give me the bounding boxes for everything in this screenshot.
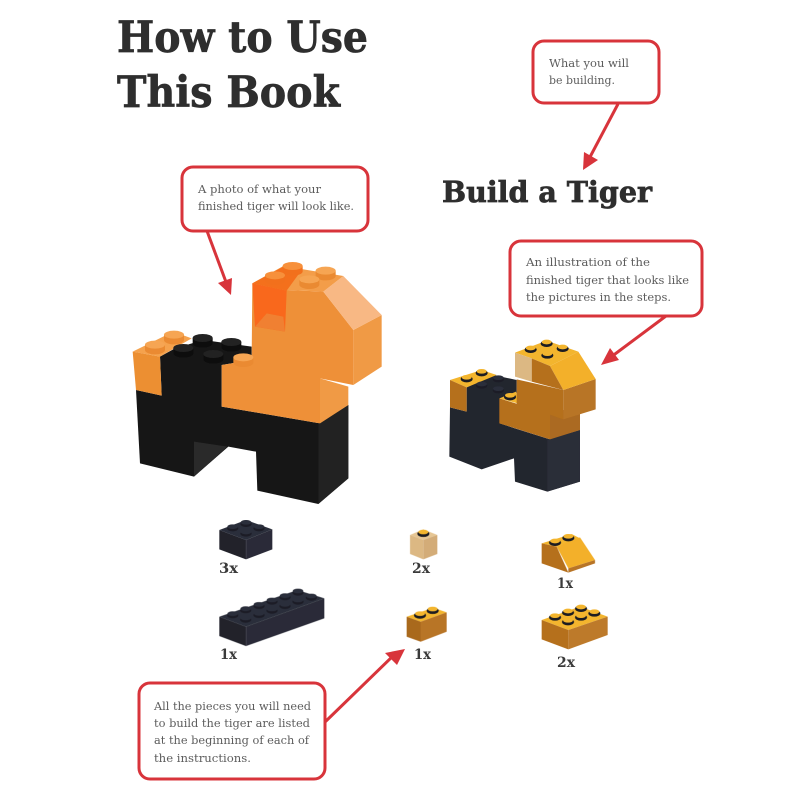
black body [136,340,348,504]
black body [449,375,580,492]
studs [461,340,569,400]
arrow: to illustration [601,316,666,365]
page title [117,13,368,118]
parts list [219,520,608,649]
callout: what you will be building: What you will [549,57,629,70]
callout: pieces you will need [139,683,325,779]
callout: illustration of finished tiger: the pictures in the steps. [526,291,671,304]
quantity labels [219,561,576,671]
callout: illustration of finished tiger: finished tiger that looks like [526,274,689,287]
brown 1x2 brick [407,607,447,642]
callout: photo of finished tiger: A photo of what your [197,183,322,196]
quantity labels: 3x [219,561,239,577]
quantity labels: 1x [414,647,432,663]
project heading: Build a Tiger: Build a Tiger [442,175,653,209]
head upper [515,341,596,390]
callout: pieces you will need: at the beginning of each of [154,734,310,747]
callout: illustration of finished tiger [510,241,702,316]
arrow: to photo [207,231,232,295]
page title: This Book [117,68,341,118]
quantity labels: 2x [557,655,576,671]
left block [450,370,497,412]
callout: pieces you will need: All the pieces you will need [153,700,311,713]
callout: illustration of finished tiger: An illustration of the [525,256,650,269]
slope brick [542,534,595,573]
arrow: to parts list [325,649,405,722]
callout: photo of finished tiger [182,167,368,231]
callout: pieces you will need: to build the tiger are listed [154,717,310,730]
shaded right leg [547,430,580,492]
head lower [517,379,596,419]
orange left block [133,332,192,396]
body block [499,392,580,439]
orange body and head [222,266,382,423]
quantity labels: 2x [412,561,431,577]
black 2x6 brick [219,589,324,646]
studs [145,262,336,367]
page title: How to Use [117,13,368,63]
callout: what you will be building [533,41,659,103]
callout: photo of finished tiger: finished tiger will look like. [198,200,354,213]
shaded leg faces [194,405,348,504]
photo of finished tiger [133,262,382,504]
callout: what you will be building: be building. [549,74,615,87]
brown 2x3 brick [542,605,608,649]
arrow: to heading [583,104,618,170]
callout: pieces you will need: the instructions. [154,752,251,765]
transparent orange brick [252,267,302,332]
tan 1x1 brick [410,529,437,559]
illustration of finished tiger [449,340,596,492]
quantity labels: 1x [220,647,238,663]
quantity labels: 1x [557,576,574,592]
black 2x2 brick [219,520,272,559]
